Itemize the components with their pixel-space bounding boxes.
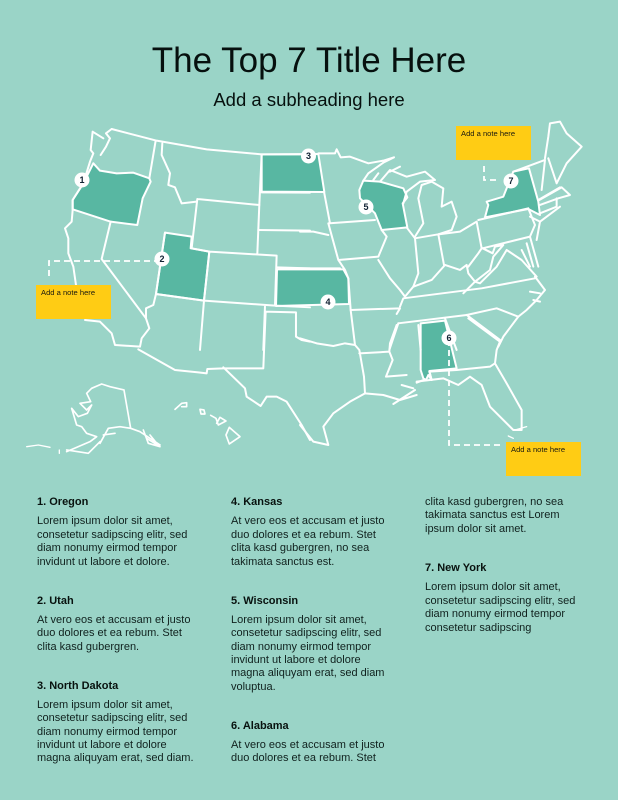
text: Oregon: 1. Oregon (37, 496, 88, 508)
text: New York (425, 562, 575, 634)
text: Kansas: At vero eos et accusam et justo (231, 515, 384, 527)
text: New York: 7. New York (425, 562, 486, 574)
text: North Dakota (37, 680, 194, 764)
text: Oregon: invidunt ut labore et dolore. (37, 556, 170, 568)
text: New York: Lorem ipsum dolor sit amet, (425, 581, 561, 593)
text: Alabama continued: clita kasd gubergren, no sea (425, 496, 563, 508)
text: North Dakota: 3. North Dakota (37, 680, 118, 692)
text: Wisconsin (231, 594, 384, 693)
text: Kansas (231, 496, 384, 568)
number markers: 4 (325, 297, 331, 307)
text: Utah: duo dolores et ea rebum. Stet (37, 627, 182, 639)
title: The Top 7 Title Here (152, 41, 466, 80)
number markers: 6 (446, 333, 452, 343)
text: Alabama continued: ipsum dolor sit amet. (425, 523, 526, 535)
text: Kansas: takimata sanctus est. (231, 556, 334, 568)
text: Kansas: clita kasd gubergren, no sea (231, 542, 369, 554)
state borders (27, 122, 582, 453)
text: Wisconsin: consetetur sadipscing elitr, sed (231, 627, 381, 639)
text: Utah: At vero eos et accusam et justo (37, 614, 190, 626)
number markers: 7 (508, 176, 514, 186)
text: Wisconsin: 5. Wisconsin (231, 594, 298, 606)
text: Utah: clita kasd gubergren. (37, 641, 139, 653)
text: Wisconsin: voluptua. (231, 681, 276, 693)
text: New York: consetetur sadipscing (425, 622, 531, 634)
text: North Dakota: magna aliquyam erat, sed diam. (37, 752, 194, 764)
text: Oregon: consetetur sadipscing elitr, sed (37, 529, 187, 541)
text: North Dakota: invidunt ut labore et dolore (37, 739, 167, 751)
icon: Hawaii (175, 403, 240, 444)
text: Oregon: Lorem ipsum dolor sit amet, (37, 515, 173, 527)
note: Utah: Add a note here (41, 288, 95, 297)
text: Alabama: 6. Alabama (231, 720, 289, 732)
text: North Dakota: consetetur sadipscing elitr, sed (37, 712, 187, 724)
text: Wisconsin: diam nonumy eirmod tempor (231, 641, 371, 653)
number markers: 2 (159, 254, 165, 264)
text: Kansas: duo dolores et ea rebum. Stet (231, 529, 376, 541)
note: Alabama: Add a note here (511, 445, 565, 454)
text: Alabama (231, 720, 384, 764)
text: North Dakota: Lorem ipsum dolor sit amet, (37, 699, 173, 711)
note: Alabama (506, 442, 581, 476)
text: Kansas: 4. Kansas (231, 496, 282, 508)
text: Wisconsin: magna aliquyam erat, sed diam (231, 667, 384, 679)
note: New York (456, 126, 531, 160)
text: Utah (37, 594, 190, 653)
subheading: Add a subheading here (213, 89, 405, 110)
text: Utah: 2. Utah (37, 594, 74, 606)
note: Utah (36, 285, 111, 319)
text: New York: diam nonumy eirmod tempor (425, 608, 565, 620)
note: New York: Add a note here (461, 129, 515, 138)
text: Oregon: diam nonumy eirmod tempor (37, 542, 177, 554)
icon: Alaska (67, 384, 160, 453)
text: Alabama continued (425, 496, 564, 535)
text: Alabama: At vero eos et accusam et justo (231, 739, 384, 751)
text: Wisconsin: invidunt ut labore et dolore (231, 654, 361, 666)
number markers (74, 148, 518, 346)
highlighted states (73, 154, 540, 380)
text: Alabama continued: takimata sanctus est Lorem (425, 509, 560, 521)
number markers: 3 (306, 151, 311, 161)
number markers: 1 (79, 175, 85, 185)
text: Oregon (37, 496, 187, 568)
text: Alabama: duo dolores et ea rebum. Stet (231, 752, 376, 764)
text: Wisconsin: Lorem ipsum dolor sit amet, (231, 614, 367, 626)
dashed leader lines (49, 166, 502, 445)
text: North Dakota: diam nonumy eirmod tempor (37, 726, 177, 738)
number markers: 5 (363, 202, 369, 212)
text: New York: consetetur sadipscing elitr, sed (425, 595, 575, 607)
